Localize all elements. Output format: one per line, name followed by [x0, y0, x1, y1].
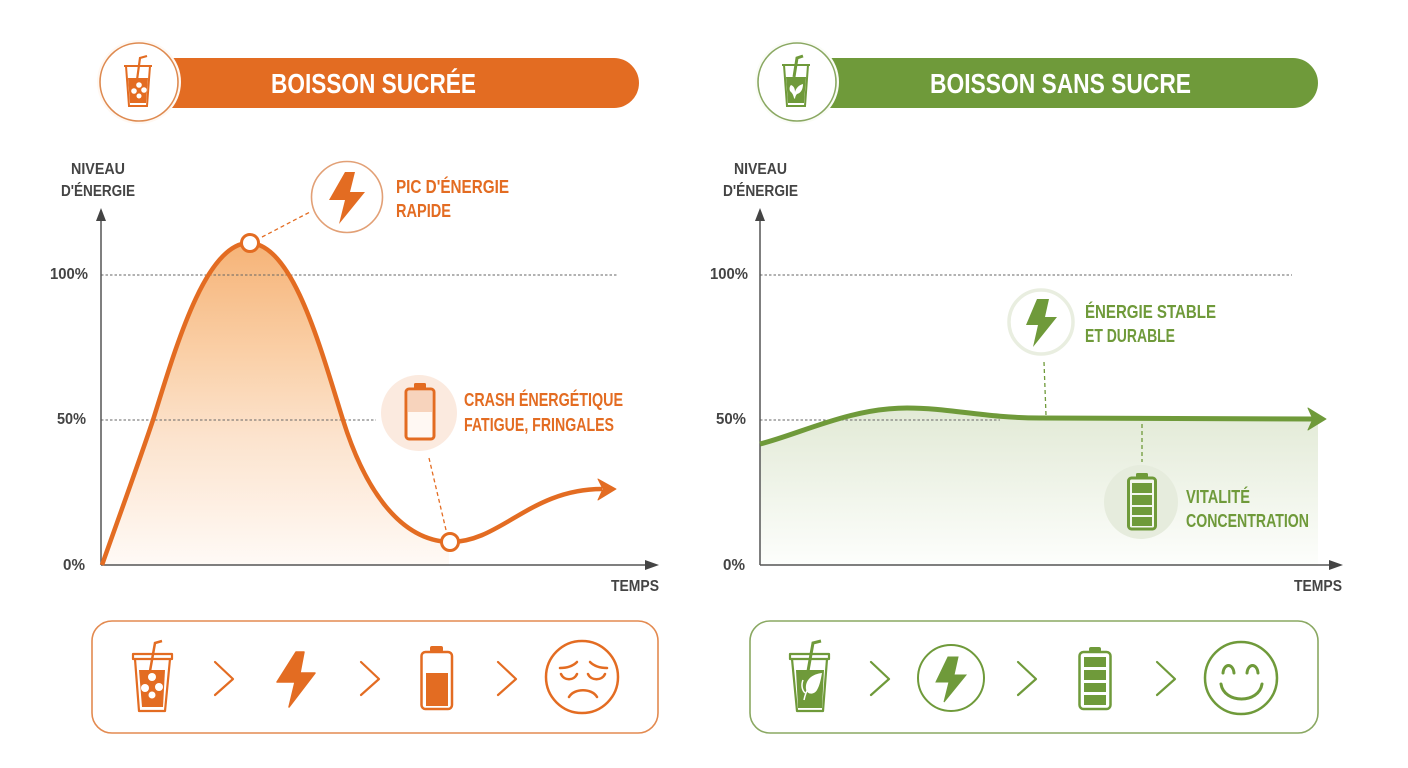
arrow head [598, 479, 616, 500]
chart: sugary drink energy curve [50, 161, 659, 595]
energy curve [102, 243, 602, 565]
y axis title left: D'ÉNERGIE [61, 181, 135, 200]
arrow 3 [498, 662, 516, 695]
callout: stable energy: ÉNERGIE STABLE [1085, 301, 1216, 322]
crash marker [442, 534, 458, 550]
curve area fill right [760, 408, 1318, 565]
y axis title right [723, 161, 798, 200]
y axis title left [61, 161, 135, 200]
callout: energy peak: PIC D'ÉNERGIE [396, 176, 509, 197]
icon: sugary drink badge [97, 40, 181, 124]
curve area fill [102, 243, 449, 565]
x axis label right: TEMPS [1294, 578, 1342, 595]
arrow 5 [1018, 662, 1036, 695]
callout: energy peak [312, 162, 509, 232]
arrow 6 [1157, 662, 1175, 695]
header: boisson sucrée [97, 40, 639, 124]
callout: energy crash: CRASH ÉNERGÉTIQUE [464, 389, 623, 410]
icon: sad face [546, 641, 618, 713]
icon: full battery [1080, 647, 1110, 709]
y axis title left: NIVEAU [71, 161, 125, 178]
arrow 2 [361, 662, 379, 695]
y axis ticks right: 50% [716, 411, 746, 428]
header title left: BOISSON SUCRÉE [271, 68, 476, 99]
icon: iced drink [133, 641, 172, 711]
axes right [755, 208, 1343, 570]
y axis ticks left [50, 266, 88, 574]
callout: vitality: VITALITÉ [1186, 486, 1250, 507]
y axis ticks left: 100% [50, 266, 88, 283]
callout: vitality [1104, 465, 1309, 539]
peak marker [242, 234, 258, 252]
axes left [96, 208, 659, 570]
callout: stable energy [1009, 290, 1216, 354]
y axis title right: NIVEAU [734, 161, 787, 178]
y axis ticks right: 100% [710, 266, 748, 283]
icon: half battery [422, 646, 452, 709]
stable energy curve [760, 408, 1314, 444]
header: boisson sans sucre [755, 40, 1318, 124]
callout: stable energy: ET DURABLE [1085, 326, 1175, 346]
callout: energy crash [381, 375, 623, 451]
callout: vitality: CONCENTRATION [1186, 511, 1309, 531]
y axis ticks right [710, 266, 748, 574]
arrow head right [1308, 408, 1326, 430]
arrow 1 [215, 662, 233, 695]
icon: lightning bolt [277, 652, 315, 707]
icon: bolt in circle [918, 645, 984, 711]
arrow 4 [871, 662, 889, 695]
icon: sugar-free drink badge [755, 40, 839, 124]
header title right: BOISSON SANS SUCRE [930, 68, 1191, 99]
icon: leaf drink [790, 641, 829, 711]
y axis ticks left: 0% [63, 557, 85, 574]
icon: happy face [1205, 642, 1277, 714]
x axis label left: TEMPS [611, 578, 659, 595]
y axis ticks left: 50% [57, 411, 86, 428]
panel: sugary drink sequence [92, 621, 658, 733]
y axis title right: D'ÉNERGIE [723, 181, 798, 200]
y axis ticks right: 0% [723, 557, 745, 574]
chart: sugar-free drink energy curve [710, 161, 1343, 595]
callout: energy peak: RAPIDE [396, 201, 451, 221]
callout: energy crash: FATIGUE, FRINGALES [464, 415, 614, 435]
panel: sugar-free drink sequence [750, 621, 1318, 733]
